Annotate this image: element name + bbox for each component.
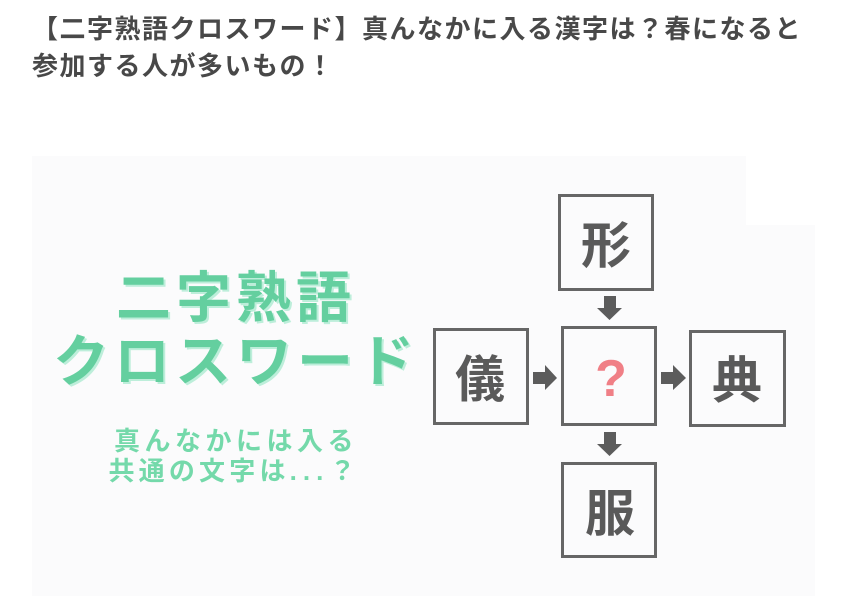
subtitle text — [108, 426, 360, 486]
heading: 二字熟語: 二字熟語 — [116, 267, 356, 329]
box: 服 — [562, 464, 656, 556]
box: 服: 服 — [585, 486, 635, 542]
title: 参加する人が多いもの！ — [32, 51, 335, 81]
arrow: right to 典 — [661, 365, 686, 390]
subtitle text: 共通の文字は...？ — [108, 456, 360, 486]
heading: クロスワード: クロスワード — [53, 330, 419, 393]
title — [32, 14, 802, 81]
box: question mark — [562, 328, 656, 424]
box: 形: 形 — [581, 218, 631, 274]
box: 典: 典 — [712, 353, 762, 409]
arrow: right from 儀 — [533, 365, 557, 390]
subtitle text: 真んなかには入る — [114, 426, 358, 456]
arrow: down from 形 — [597, 296, 622, 320]
box: 形 — [560, 196, 652, 290]
box: 儀 — [434, 330, 528, 424]
heading: 二字熟語: 二字熟語 — [118, 269, 358, 331]
box: question mark: ? — [595, 350, 627, 408]
arrow: down to 服 — [597, 432, 622, 456]
heading: クロスワード: クロスワード — [55, 332, 421, 395]
box: 儀: 儀 — [455, 352, 505, 408]
title: 【二字熟語クロスワード】真んなかに入る漢字は？春になると — [32, 14, 802, 44]
box: 典 — [690, 332, 784, 426]
